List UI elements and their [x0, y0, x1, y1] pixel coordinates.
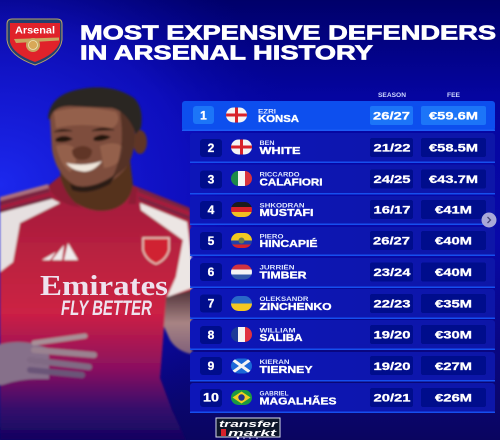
row 7: Zinchenko: 7	[208, 296, 215, 310]
row 5: Hincapié: PIERO	[260, 234, 284, 240]
row 7: Zinchenko: OLEKSANDR	[260, 296, 309, 303]
row 9: Tierney	[190, 352, 495, 382]
row 1: Konsa: EZRI	[258, 108, 276, 116]
row 9: Tierney: 19/20	[374, 361, 410, 373]
row 3: Calafiori	[190, 164, 495, 194]
row 4: Mustafi: 16/17	[374, 204, 410, 216]
shirt sponsor text: FLY BETTER	[61, 297, 153, 320]
row 8: Saliba	[190, 320, 495, 350]
row 7: Zinchenko: €35M	[435, 298, 472, 310]
row 2: White	[190, 133, 495, 163]
row 9: Tierney: TIERNEY	[260, 365, 313, 376]
beard	[70, 174, 116, 192]
row 10: Magalhães: 10	[203, 390, 219, 404]
row 4: Mustafi: €41M	[435, 204, 472, 216]
row 8: Saliba: 8	[208, 328, 215, 342]
row 6: Timber: €40M	[435, 267, 472, 279]
face	[50, 102, 135, 187]
row 4: Mustafi: SHKODRAN	[260, 202, 305, 210]
title: IN ARSENAL HISTORY	[80, 42, 374, 64]
row 3: Calafiori: €43.7M	[429, 174, 478, 186]
row 10: Magalhães: 20/21	[374, 392, 410, 404]
row 3: Calafiori: RICCARDO	[260, 172, 300, 178]
row 10: Magalhães: €26M	[435, 392, 472, 404]
eyes and brows	[54, 128, 114, 142]
row 2: White: BEN	[260, 140, 275, 147]
row 5: Hincapié: 5	[208, 234, 215, 248]
row 2: White: 2	[208, 141, 215, 155]
row 8: Saliba: 19/20	[374, 330, 410, 342]
row 2: White: 21/22	[374, 142, 410, 154]
ear	[133, 130, 147, 154]
row 1: Konsa: 26/27	[373, 110, 410, 122]
shirt crest	[143, 238, 169, 264]
hand	[0, 336, 94, 375]
row 7: Zinchenko: ZINCHENKO	[260, 302, 332, 313]
row 10: Magalhães: MAGALHÃES	[260, 394, 337, 408]
forehead and cheek highlights	[54, 108, 124, 172]
nose	[72, 146, 92, 160]
row 6: Timber: 23/24	[374, 267, 412, 279]
collar	[48, 176, 137, 208]
row 6: Timber: TIMBER	[260, 270, 307, 282]
row 1: Konsa: KONSA	[258, 114, 299, 125]
right arm	[162, 285, 192, 354]
shirt sponsor text	[40, 270, 168, 320]
title: MOST EXPENSIVE DEFENDERS	[80, 22, 496, 44]
column headers: FEE	[447, 93, 460, 99]
row 5: Hincapié	[190, 227, 495, 256]
row 10: Magalhães	[190, 383, 495, 413]
logo: transfermarkt: transfer	[219, 419, 279, 430]
row 4: Mustafi: MUSTAFI	[260, 208, 314, 219]
left sleeve	[0, 198, 60, 272]
logo: transfermarkt: markt	[228, 428, 278, 439]
row 3: Calafiori: 3	[208, 172, 215, 186]
row 5: Hincapié: €40M	[435, 236, 472, 248]
row 7: Zinchenko	[190, 289, 495, 319]
hair	[48, 87, 142, 134]
row 4: Mustafi	[190, 196, 495, 225]
carousel dots	[237, 437, 258, 439]
shoulder stripes	[0, 184, 50, 205]
row 5: Hincapié: 26/27	[373, 236, 410, 248]
row 10: Magalhães: GABRIEL	[260, 390, 289, 398]
row 2: White: €58.5M	[429, 142, 478, 154]
row 1: Konsa: €59.6M	[429, 110, 478, 122]
row 7: Zinchenko: 22/23	[374, 298, 410, 310]
row 8: Saliba: WILLIAM	[260, 328, 296, 334]
row 6: Timber: 6	[208, 265, 215, 279]
row 5: Hincapié: HINCAPIÉ	[260, 237, 318, 250]
column headers: SEASON	[378, 93, 406, 99]
icon: Arsenal crest: Arsenal	[15, 26, 55, 36]
column headers	[378, 93, 460, 99]
title	[80, 22, 496, 64]
row 1: Konsa	[182, 101, 495, 131]
row 8: Saliba: €30M	[435, 330, 472, 342]
row 8: Saliba: SALIBA	[260, 333, 302, 344]
row 1: Konsa: 1	[200, 108, 207, 122]
neck	[60, 160, 133, 211]
row 9: Tierney: KIERAN	[260, 359, 290, 366]
smile	[66, 161, 102, 172]
row 3: Calafiori: 24/25	[374, 174, 410, 186]
logo: transfermarkt	[216, 418, 280, 439]
row 9: Tierney: 9	[208, 359, 215, 373]
shadow on face side	[112, 112, 135, 178]
row 3: Calafiori: CALAFIORI	[260, 178, 323, 188]
row 6: Timber	[190, 258, 495, 288]
row 2: White: WHITE	[260, 146, 301, 157]
row 9: Tierney: €27M	[435, 361, 472, 373]
icon: Arsenal crest	[7, 19, 62, 65]
adidas stripes	[42, 243, 78, 260]
player photo	[0, 87, 192, 440]
icon: next arrow button	[482, 212, 496, 228]
right sleeve	[140, 203, 192, 297]
row 4: Mustafi: 4	[208, 203, 215, 217]
shirt sponsor text: Emirates	[40, 270, 168, 302]
row 6: Timber: JURRIËN	[260, 264, 295, 272]
shirt	[0, 186, 192, 440]
